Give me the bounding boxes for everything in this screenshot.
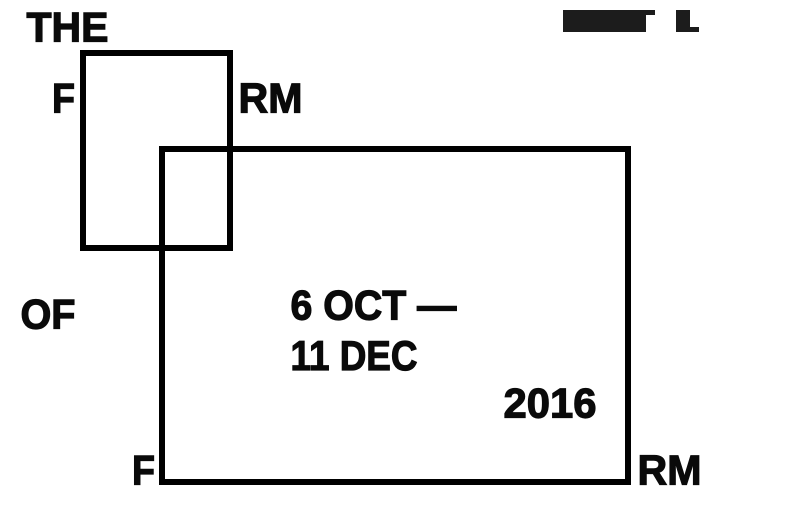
- title letter: F (small rectangle): F: [52, 74, 75, 122]
- end date: 11 DEC: [290, 332, 418, 379]
- title letters: RM (large rectangle): RM: [638, 446, 702, 494]
- title word: THE: THE: [26, 4, 108, 50]
- redacted logo letter L: [676, 10, 699, 32]
- title word: OF: OF: [20, 290, 76, 338]
- title letters: RM (small rectangle): RM: [238, 74, 302, 122]
- redacted logo block: [563, 10, 655, 32]
- title letter: F (large rectangle): F: [132, 446, 155, 494]
- start date: 6 OCT —: [290, 282, 456, 328]
- small form rectangle: [83, 53, 230, 248]
- large form rectangle: [162, 149, 628, 482]
- year: 2016: [504, 380, 596, 426]
